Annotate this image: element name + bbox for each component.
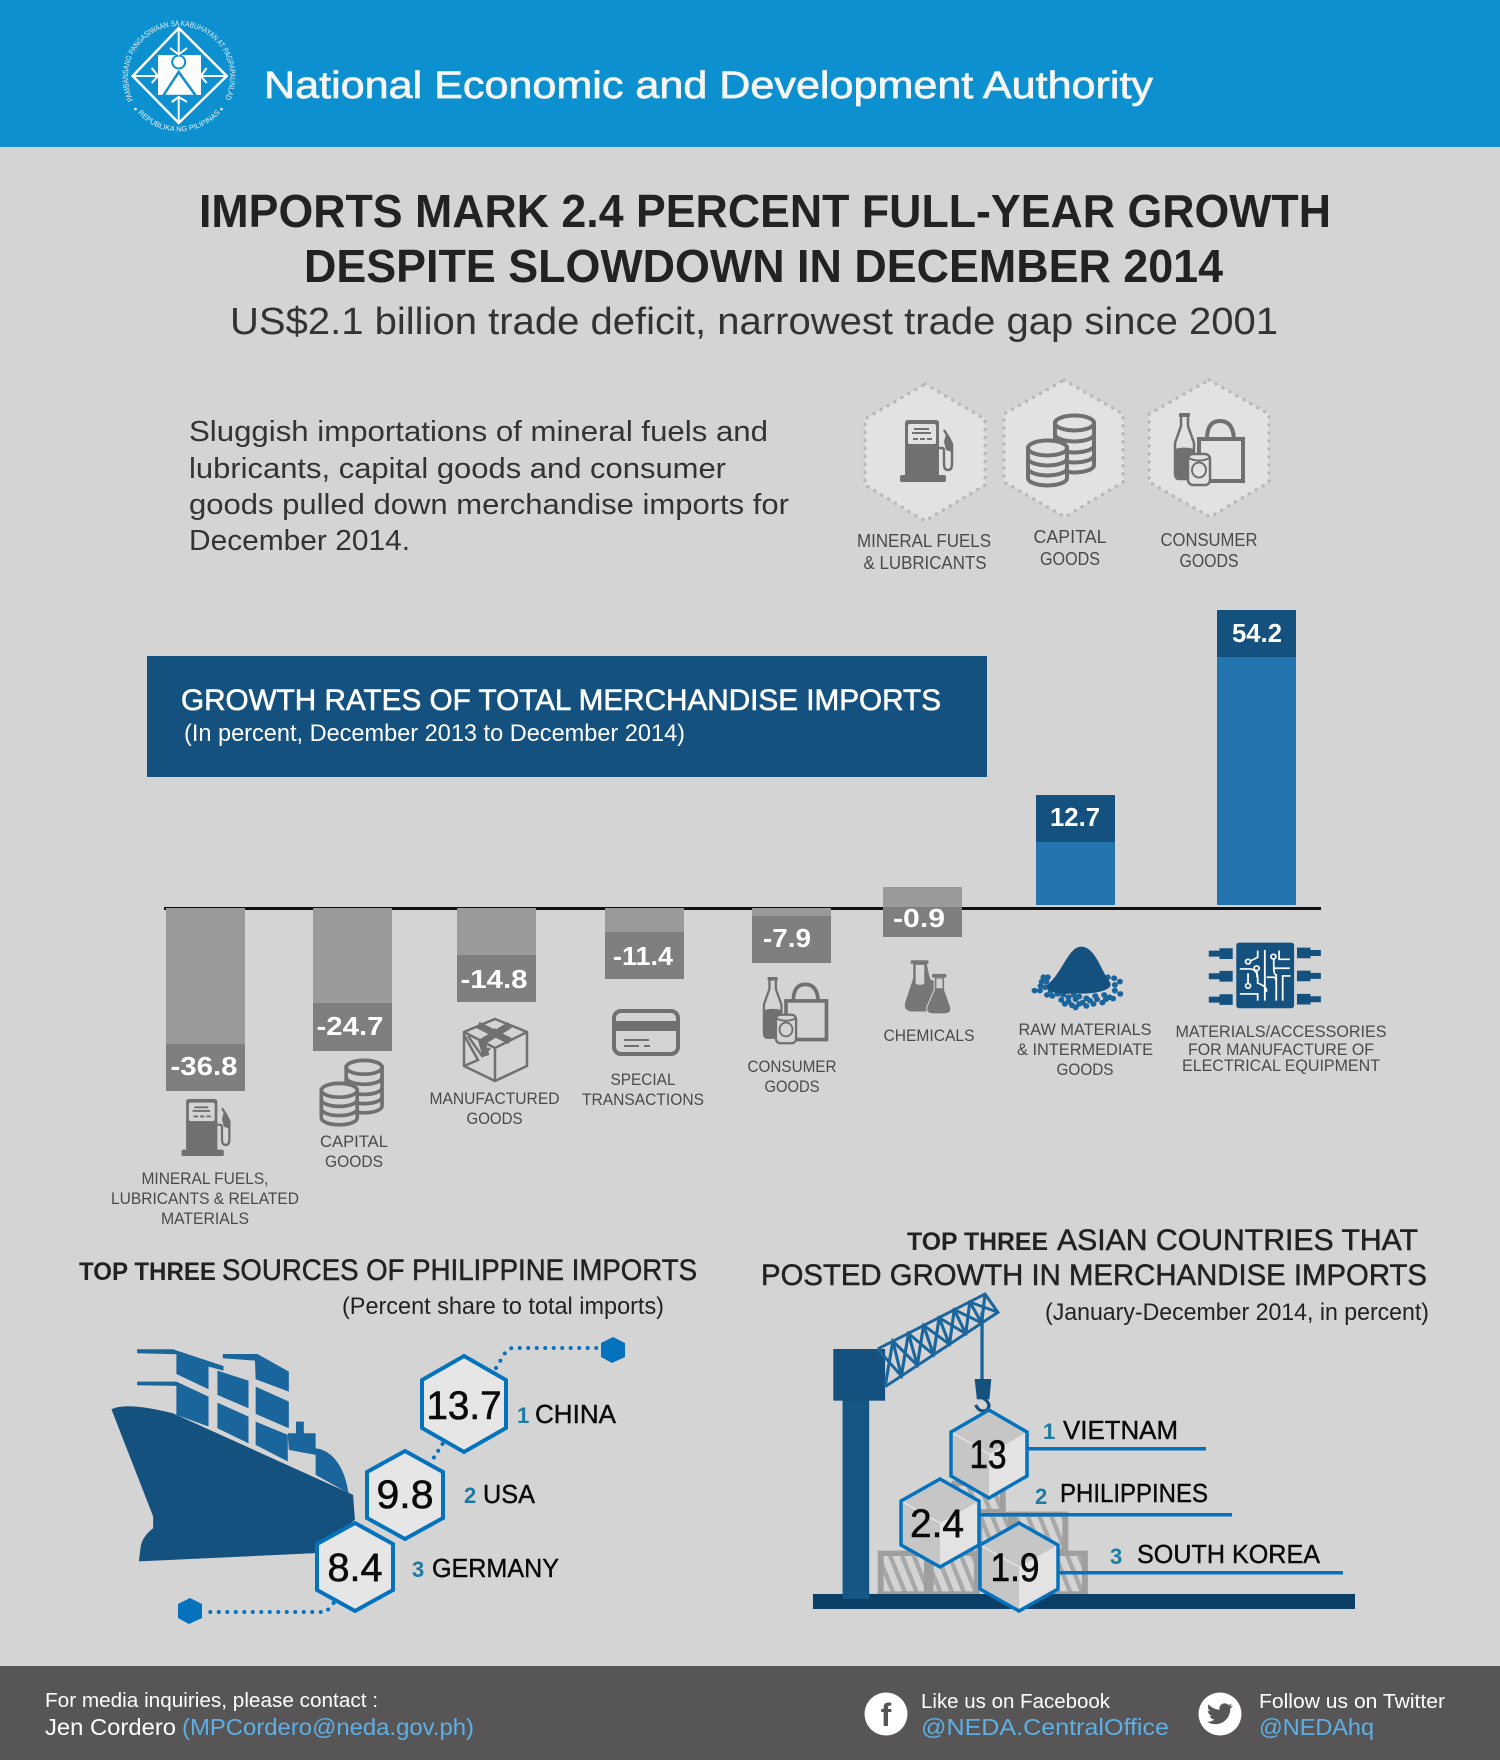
bar: consumer goods -7.9: -7.9 xyxy=(763,923,811,953)
heading: top three sources: SOURCES OF PHILIPPINE IMPORTS xyxy=(222,1254,697,1287)
subheading: January-December 2014: (January-December 2014, in percent) xyxy=(1045,1299,1429,1326)
bar: mineral fuels -36.8 xyxy=(166,908,245,1091)
bar: special transactions -11.4: -11.4 xyxy=(613,941,674,971)
label: manufactured goods: GOODS xyxy=(466,1109,522,1128)
label: materials and accessories for electrical equipment: FOR MANUFACTURE OF xyxy=(1188,1040,1374,1059)
bar: raw materials 12.7 xyxy=(1036,795,1115,905)
label: chemicals: CHEMICALS xyxy=(884,1026,974,1045)
label: materials and accessories for electrical equipment xyxy=(1176,1022,1386,1075)
panel: consumer goods hexagon xyxy=(1149,380,1269,571)
crane base xyxy=(813,1594,1355,1609)
label: mineral fuels, lubricants and related materials xyxy=(111,1169,299,1228)
hexagon: USA 9.8: 9.8 xyxy=(376,1473,434,1517)
label: Vietnam: 1 xyxy=(1043,1419,1055,1444)
label: materials and accessories for electrical equipment: ELECTRICAL EQUIPMENT xyxy=(1182,1056,1380,1075)
heading: top three Asian countries: TOP THREE xyxy=(907,1228,1048,1256)
connector: dotted link China to USA xyxy=(434,1444,442,1458)
label: USA: 2 xyxy=(464,1483,476,1508)
hexagon: China 13.7 xyxy=(422,1356,506,1452)
label: special transactions: SPECIAL xyxy=(610,1070,676,1089)
cube hexagon: Vietnam 13 xyxy=(951,1410,1027,1498)
icon: NEDA seal logo: PAMBANSANG PANGASIWAAN SA KABUHAYAN AT PAGPAPAUNLAD xyxy=(122,20,236,102)
bar: capital goods -24.7: -24.7 xyxy=(316,1011,384,1041)
Twitter handle xyxy=(1259,1691,1445,1740)
media contact: (MPCordero@neda.gov.ph) xyxy=(182,1714,474,1740)
heading: top three Asian countries: ASIAN COUNTRIES THAT xyxy=(1057,1224,1418,1257)
icon: chemical flasks xyxy=(905,960,951,1014)
bar: capital goods -24.7 xyxy=(313,908,392,1051)
label: China: 1 xyxy=(517,1403,529,1428)
title: DESPITE SLOWDOWN IN DECEMBER 2014 xyxy=(304,240,1223,292)
title xyxy=(199,185,1331,292)
label: Germany: GERMANY xyxy=(432,1553,559,1583)
panel: mineral fuels hexagon xyxy=(857,384,991,573)
icon: bottle, can and bag xyxy=(1175,413,1243,485)
bar: chemicals -0.9: -0.9 xyxy=(893,903,945,933)
label: special transactions: TRANSACTIONS xyxy=(582,1090,704,1109)
label: consumer goods xyxy=(1160,530,1258,571)
label: mineral fuels, lubricants and related materials: MATERIALS xyxy=(161,1209,249,1228)
icon: fuel pump xyxy=(900,420,952,482)
icon: coins xyxy=(1028,416,1094,486)
subheading: percent share: (Percent share to total imports) xyxy=(342,1293,664,1320)
bar: consumer goods -7.9 xyxy=(752,908,831,963)
connector: dotted trail from China to end marker xyxy=(496,1337,625,1368)
intro paragraph: goods pulled down merchandise imports for xyxy=(189,489,789,521)
bar: manufactured goods -14.8 xyxy=(457,908,536,1002)
bar: chemicals -0.9 xyxy=(883,887,962,937)
panel: footer xyxy=(0,1666,1500,1760)
icon: Twitter xyxy=(1198,1692,1242,1736)
intro paragraph xyxy=(189,416,789,557)
title: IMPORTS MARK 2.4 PERCENT FULL-YEAR GROWTH xyxy=(199,185,1331,237)
label: capital goods: GOODS xyxy=(325,1152,383,1171)
Facebook handle xyxy=(921,1691,1169,1740)
crane hook xyxy=(975,1312,991,1411)
icon: fuel pump small xyxy=(182,1099,229,1156)
bar: special transactions -11.4 xyxy=(605,908,684,979)
axis line xyxy=(164,907,1321,910)
label: special transactions xyxy=(582,1070,704,1109)
label: raw materials and intermediate goods: & INTERMEDIATE xyxy=(1017,1040,1153,1059)
label: raw materials and intermediate goods: RAW MATERIALS xyxy=(1018,1020,1152,1039)
hexagon: Germany 8.4 xyxy=(317,1523,393,1611)
label: consumer goods: GOODS xyxy=(764,1077,820,1096)
icon: circuit chip xyxy=(1209,943,1321,1008)
label: raw materials and intermediate goods: GOODS xyxy=(1056,1060,1114,1079)
label: mineral fuels and lubricants: MINERAL FUELS xyxy=(857,531,991,551)
label: Philippines: 2 xyxy=(1035,1484,1047,1509)
crates xyxy=(881,1483,1085,1594)
label: China: CHINA xyxy=(535,1399,617,1429)
panel: header band xyxy=(0,0,1500,147)
icon: NEDA seal logo: REPUBLIKA NG PILIPINAS xyxy=(138,110,220,132)
Twitter handle: Follow us on Twitter xyxy=(1259,1691,1445,1713)
heading: top three Asian countries xyxy=(761,1224,1427,1292)
panel: chart title banner: GROWTH RATES OF TOTAL MERCHANDISE IMPORTS xyxy=(181,684,941,717)
heading: top three sources: TOP THREE xyxy=(79,1258,216,1286)
label: manufactured goods xyxy=(430,1089,560,1128)
hexagon: Germany 8.4: 8.4 xyxy=(328,1546,382,1590)
icon: raw material mound xyxy=(1035,947,1120,1008)
label: materials and accessories for electrical equipment: MATERIALS/ACCESSORIES xyxy=(1176,1022,1386,1041)
cube hexagon: Philippines 2.4 xyxy=(901,1479,979,1567)
cube hexagon: South Korea 1.9: 1.9 xyxy=(990,1546,1040,1590)
header title: National Economic and Development Authority xyxy=(264,65,1153,107)
label: South Korea: SOUTH KOREA xyxy=(1137,1539,1321,1569)
panel: capital goods hexagon xyxy=(1004,380,1123,569)
label: manufactured goods: MANUFACTURED xyxy=(430,1089,560,1108)
label: consumer goods: CONSUMER xyxy=(748,1057,836,1076)
panel: chart title banner xyxy=(147,656,987,777)
label: capital goods xyxy=(320,1132,388,1171)
icon: coins small xyxy=(321,1060,382,1125)
icon: package box xyxy=(464,1019,527,1081)
label: consumer goods xyxy=(748,1057,836,1096)
icon: crane with stacked crates xyxy=(813,1294,1355,1609)
heading: top three Asian countries: POSTED GROWTH IN MERCHANDISE IMPORTS xyxy=(761,1259,1427,1292)
label: Vietnam: VIETNAM xyxy=(1063,1415,1178,1445)
hexagon: China 13.7: 13.7 xyxy=(426,1384,502,1428)
label: capital goods: CAPITAL xyxy=(320,1132,388,1151)
icon: container ship xyxy=(111,1349,355,1561)
label: mineral fuels and lubricants: & LUBRICANTS xyxy=(864,553,986,573)
bar: electrical equipment materials 54.2: 54.2 xyxy=(1232,618,1282,648)
label: USA: USA xyxy=(483,1479,536,1509)
cube hexagon: Vietnam 13: 13 xyxy=(970,1433,1006,1477)
icon: Facebook xyxy=(864,1692,908,1736)
hexagon: USA 9.8 xyxy=(367,1451,443,1539)
media contact: Jen Cordero xyxy=(45,1714,176,1740)
intro paragraph: lubricants, capital goods and consumer xyxy=(189,453,726,485)
label: raw materials and intermediate goods xyxy=(1017,1020,1153,1079)
leader line: South Korea xyxy=(1058,1571,1343,1574)
Facebook handle: @NEDA.CentralOffice xyxy=(921,1714,1169,1740)
bar: electrical equipment materials 54.2 xyxy=(1217,610,1296,905)
leader line: Philippines xyxy=(979,1513,1232,1516)
label: consumer goods: CONSUMER xyxy=(1160,530,1258,550)
label: capital goods xyxy=(1034,527,1106,569)
media contact: For media inquiries, please contact : xyxy=(45,1690,378,1712)
label: South Korea: 3 xyxy=(1110,1544,1122,1569)
bar: mineral fuels -36.8: -36.8 xyxy=(170,1051,238,1081)
panel: chart title banner: (In percent, December 2013 to December 2014) xyxy=(184,720,685,747)
leader line: Vietnam xyxy=(1028,1447,1206,1450)
crane tower xyxy=(833,1349,885,1599)
label: consumer goods: GOODS xyxy=(1180,551,1238,571)
label: Germany: 3 xyxy=(412,1557,424,1582)
label: capital goods: CAPITAL xyxy=(1034,527,1106,547)
label: mineral fuels and lubricants xyxy=(857,531,991,573)
label: Philippines: PHILIPPINES xyxy=(1060,1478,1208,1508)
icon: payment card xyxy=(614,1011,678,1054)
cube hexagon: Philippines 2.4: 2.4 xyxy=(910,1502,964,1546)
intro paragraph: December 2014. xyxy=(189,525,410,557)
label: capital goods: GOODS xyxy=(1040,549,1100,569)
bar: manufactured goods -14.8: -14.8 xyxy=(460,964,528,994)
label: mineral fuels, lubricants and related materials: LUBRICANTS & RELATED xyxy=(111,1189,299,1208)
icon: bottle, can and bag small xyxy=(764,977,826,1043)
subtitle: US$2.1 billion trade deficit, narrowest trade gap since 2001 xyxy=(230,301,1278,343)
bar: raw materials 12.7: 12.7 xyxy=(1050,802,1100,832)
connector: dotted trail from Germany to end marker xyxy=(178,1598,334,1624)
Facebook handle: Like us on Facebook xyxy=(921,1691,1111,1713)
icon: Facebook: f xyxy=(881,1697,892,1733)
intro paragraph: Sluggish importations of mineral fuels and xyxy=(189,416,768,448)
media contact xyxy=(45,1690,474,1740)
cube hexagon: South Korea 1.9 xyxy=(980,1523,1058,1611)
Twitter handle: @NEDAhq xyxy=(1259,1714,1374,1740)
label: mineral fuels, lubricants and related materials: MINERAL FUELS, xyxy=(142,1169,268,1188)
crane boom xyxy=(878,1294,998,1387)
